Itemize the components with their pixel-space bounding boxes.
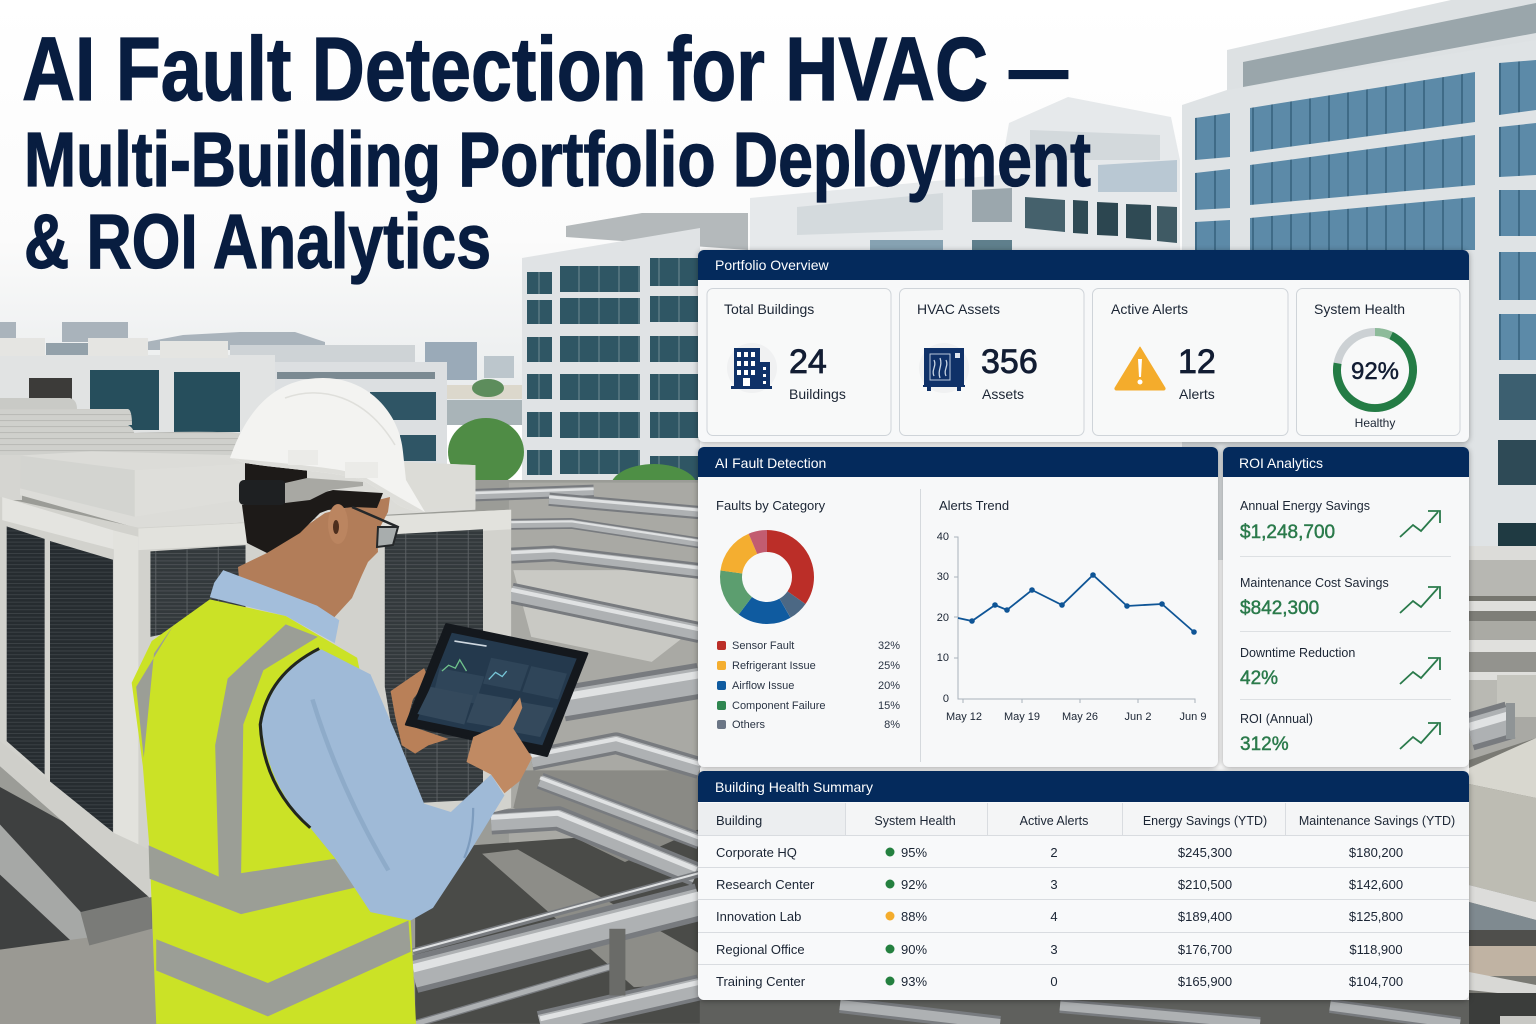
neck, face and hair bbox=[238, 490, 398, 622]
line chart: alerts trend: 30 bbox=[937, 571, 949, 583]
HVAC rooftop unit bbox=[0, 398, 511, 898]
tablet screen bbox=[417, 633, 577, 745]
donut legend: Airflow Issue bbox=[732, 680, 794, 692]
panel: AI fault detection: AI Fault Detection bbox=[715, 455, 826, 471]
distant hazy building bbox=[750, 97, 1180, 260]
line chart: alerts trend: 20 bbox=[937, 612, 949, 624]
metric: annual energy savings bbox=[1240, 499, 1440, 543]
panel header bbox=[1223, 447, 1469, 477]
table row: Research Center: $142,600 bbox=[1349, 877, 1403, 892]
title: — bbox=[1009, 24, 1068, 113]
bottom strip pipes bbox=[700, 1000, 1469, 1024]
card: total buildings: 24 bbox=[789, 343, 827, 381]
icon: building bbox=[727, 343, 777, 393]
donut legend: 25% bbox=[878, 660, 900, 672]
table row: Research Center bbox=[716, 877, 1403, 892]
table row: Corporate HQ: 95% bbox=[901, 845, 927, 860]
gauge: 92% healthy: 92% bbox=[1351, 358, 1399, 385]
metric: downtime reduction: 42% bbox=[1240, 668, 1278, 689]
panel header bbox=[698, 771, 1469, 802]
card: system health: Healthy bbox=[1355, 416, 1395, 430]
panel: ROI analytics bbox=[1223, 447, 1469, 767]
panel: portfolio overview bbox=[698, 250, 1469, 442]
table row: Research Center: Research Center bbox=[716, 877, 815, 892]
card: HVAC assets: Assets bbox=[982, 386, 1024, 402]
icon: HVAC unit bbox=[919, 343, 969, 393]
table header row bbox=[698, 803, 1469, 835]
metric: annual energy savings: Annual Energy Savings bbox=[1240, 499, 1370, 513]
card: active alerts bbox=[1092, 288, 1288, 436]
card: active alerts: 12 bbox=[1178, 343, 1216, 381]
insulated pipe on the right bbox=[1469, 703, 1515, 739]
metric: annual ROI bbox=[1240, 712, 1440, 755]
card: system health: System Health bbox=[1314, 301, 1405, 317]
title: & ROI Analytics bbox=[24, 199, 491, 285]
alerts trend heading: Alerts Trend bbox=[939, 498, 1009, 513]
table row: Corporate HQ: $180,200 bbox=[1349, 845, 1403, 860]
table header row: Energy Savings (YTD) bbox=[1143, 814, 1267, 828]
table row: Regional Office: Regional Office bbox=[716, 942, 805, 957]
title: AI Fault Detection for HVAC bbox=[22, 20, 988, 120]
icon: warning triangle bbox=[1115, 347, 1165, 390]
line chart: alerts trend bbox=[937, 531, 1206, 723]
table header row: Building bbox=[716, 813, 762, 828]
metric: annual ROI: 312% bbox=[1240, 734, 1289, 755]
title: Multi-Building Portfolio Deployment bbox=[24, 117, 1091, 203]
line chart: alerts trend: 40 bbox=[937, 531, 949, 543]
table row: Research Center: 3 bbox=[1050, 877, 1058, 892]
donut legend: Sensor Fault bbox=[732, 640, 794, 652]
hard hat and headband bbox=[230, 378, 425, 512]
hi-vis vest bbox=[132, 599, 416, 1024]
table row: Research Center: 92% bbox=[901, 877, 927, 892]
line chart: alerts trend: Jun 2 bbox=[1125, 711, 1151, 723]
gauge: 92% healthy bbox=[1325, 320, 1425, 420]
table row: Regional Office: 90% bbox=[901, 942, 927, 957]
rooftop right strip bbox=[1469, 546, 1536, 1024]
line chart: alerts trend: Jun 9 bbox=[1180, 711, 1206, 723]
panel: portfolio overview: Portfolio Overview bbox=[715, 257, 829, 273]
table row: Corporate HQ: $245,300 bbox=[1178, 845, 1232, 860]
panel header bbox=[698, 250, 1469, 280]
low buildings on the left bbox=[0, 322, 522, 467]
right office building bbox=[1182, 0, 1536, 560]
right hand bbox=[466, 697, 532, 793]
table row: Regional Office bbox=[716, 942, 1403, 957]
table header row: System Health bbox=[874, 814, 956, 828]
card: total buildings: Buildings bbox=[789, 386, 846, 402]
panel header bbox=[698, 447, 1218, 477]
middle office building bbox=[522, 213, 748, 500]
metric: maintenance cost savings: Maintenance Cost Savings bbox=[1240, 576, 1389, 590]
table row: Innovation Lab: 88% bbox=[901, 909, 927, 924]
line chart: alerts trend: 10 bbox=[937, 652, 949, 664]
table row: Corporate HQ: 2 bbox=[1050, 845, 1058, 860]
faults by category heading: Faults by Category bbox=[716, 498, 826, 513]
donut legend: 32% bbox=[878, 640, 900, 652]
card: HVAC assets bbox=[900, 288, 1084, 436]
table row: Training Center: $165,900 bbox=[1178, 974, 1232, 989]
metric: maintenance cost savings bbox=[1240, 576, 1440, 619]
left hand bbox=[391, 668, 449, 754]
rooftop base bbox=[0, 480, 700, 1024]
panel: building health summary table: Building Health Summary bbox=[715, 779, 873, 795]
card: system health bbox=[1296, 288, 1460, 436]
table row: Research Center: $210,500 bbox=[1178, 877, 1232, 892]
card: total buildings bbox=[707, 288, 891, 436]
table row: Innovation Lab: 4 bbox=[1050, 909, 1058, 924]
table row: Innovation Lab: $125,800 bbox=[1349, 909, 1403, 924]
shirt sleeve bbox=[261, 649, 504, 920]
card: HVAC assets: 356 bbox=[981, 343, 1038, 381]
card: active alerts: Alerts bbox=[1179, 386, 1215, 402]
table row: Corporate HQ: Corporate HQ bbox=[716, 845, 797, 860]
line chart: alerts trend: May 26 bbox=[1062, 711, 1098, 723]
donut legend: 20% bbox=[878, 680, 900, 692]
line chart: alerts trend: 0 bbox=[943, 693, 949, 705]
metric: annual energy savings: $1,248,700 bbox=[1240, 522, 1335, 543]
pipework bbox=[413, 483, 700, 1024]
worker inspecting tablet bbox=[132, 378, 587, 1024]
table row: Training Center: 93% bbox=[901, 974, 927, 989]
donut legend: 15% bbox=[878, 700, 900, 712]
table header row: Maintenance Savings (YTD) bbox=[1299, 814, 1455, 828]
panel: building health summary table bbox=[698, 771, 1469, 1000]
line chart: alerts trend: May 12 bbox=[946, 711, 982, 723]
title bbox=[22, 20, 1091, 285]
tablet bbox=[406, 624, 587, 756]
metric: downtime reduction: Downtime Reduction bbox=[1240, 646, 1355, 660]
zoomed-coordinate scene: pipes, units, worker bbox=[0, 378, 700, 1024]
concrete ledge and steel rail bbox=[0, 787, 156, 1024]
donut chart bbox=[717, 527, 817, 627]
donut legend: Others bbox=[732, 719, 766, 731]
shirt collar bbox=[210, 570, 339, 643]
trees bbox=[448, 379, 698, 512]
donut legend: Component Failure bbox=[732, 700, 826, 712]
unit body bbox=[0, 497, 511, 898]
table row: Regional Office: $118,900 bbox=[1349, 942, 1403, 957]
table row: Training Center bbox=[716, 974, 1403, 989]
table row: Regional Office: 3 bbox=[1050, 942, 1058, 957]
card: total buildings: Total Buildings bbox=[724, 301, 814, 317]
reflective stripes bbox=[136, 624, 411, 1016]
card: HVAC assets: HVAC Assets bbox=[917, 301, 1000, 317]
table row: Innovation Lab bbox=[716, 909, 1403, 924]
panel: AI fault detection bbox=[698, 447, 1218, 767]
sky bbox=[0, 0, 1536, 400]
line chart: alerts trend: May 19 bbox=[1004, 711, 1040, 723]
panel: ROI analytics: ROI Analytics bbox=[1239, 455, 1323, 471]
table row: Training Center: 0 bbox=[1050, 974, 1058, 989]
donut legend: 8% bbox=[884, 719, 900, 731]
metric: annual ROI: ROI (Annual) bbox=[1240, 712, 1313, 726]
table row: Regional Office: $176,700 bbox=[1178, 942, 1232, 957]
metric: maintenance cost savings: $842,300 bbox=[1240, 598, 1319, 619]
table row: Corporate HQ bbox=[716, 845, 1403, 860]
condenser fans bbox=[0, 398, 245, 500]
metric: downtime reduction bbox=[1240, 646, 1440, 689]
table row: Innovation Lab: Innovation Lab bbox=[716, 909, 801, 924]
table row: Training Center: Training Center bbox=[716, 974, 806, 989]
donut legend: Refrigerant Issue bbox=[732, 660, 816, 672]
table row: Innovation Lab: $189,400 bbox=[1178, 909, 1232, 924]
unit lid bbox=[20, 451, 475, 528]
donut legend bbox=[717, 640, 900, 731]
table row: Training Center: $104,700 bbox=[1349, 974, 1403, 989]
table header row: Active Alerts bbox=[1020, 814, 1088, 828]
card: active alerts: Active Alerts bbox=[1111, 301, 1188, 317]
